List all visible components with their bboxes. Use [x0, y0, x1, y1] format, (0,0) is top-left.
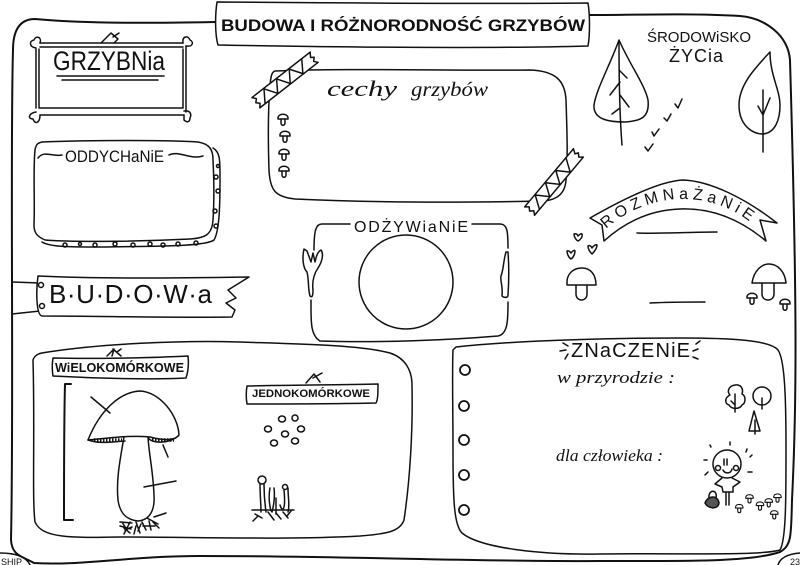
text: w przyrodzie: w przyrodzie : [557, 368, 675, 387]
banner: budowa [12, 276, 249, 317]
tape top [252, 52, 318, 108]
mushroom diagram [88, 391, 179, 534]
panel: rozmnażanie [566, 179, 791, 311]
panel: środowisko życia [594, 28, 780, 152]
title: BUDOWA I RÓŻNORODNOŚĆ GRZYBÓW [221, 16, 586, 35]
icon: fork [303, 249, 322, 297]
bracket [64, 384, 73, 520]
frame [36, 43, 186, 115]
icon: yeast cells [264, 415, 304, 446]
ribbon [590, 180, 777, 241]
icon: grass ticks [645, 99, 682, 151]
panel: cechy grzybów: grzybów [411, 79, 489, 101]
panel: wielokomórkowe i jednokomórkowe [33, 341, 412, 538]
label: jednokomórkowe [246, 373, 378, 404]
label: jednokomórkowe: JEDNOKOMÓRKOWE [252, 387, 370, 400]
title [216, 2, 589, 48]
heading: cechy [327, 76, 397, 101]
icon: mushroom right [747, 264, 790, 310]
heading: ZNaCZENiE [571, 340, 690, 362]
panel: oddychanie [34, 140, 220, 247]
label: wielokomórkowe: WiELOKOMÓRKOWE [55, 360, 184, 375]
label: wielokomórkowe [52, 349, 188, 379]
page tab left [0, 553, 30, 565]
panel: środowisko życia: ŻYCia [669, 46, 724, 66]
banner: budowa: B·U·D·O·W·a [49, 279, 213, 309]
icon: conifer tree [594, 40, 648, 145]
panel: odżywianie [303, 217, 509, 342]
icon: mould [252, 476, 294, 521]
heading: ODŻYWiaNiE [354, 217, 468, 236]
page tab right [778, 553, 800, 565]
ring holes [459, 365, 470, 515]
icon: small mushrooms [278, 114, 290, 177]
icon: mushroom left [567, 268, 596, 300]
pattern dots [63, 164, 220, 247]
text: dla człowieka: dla człowieka : [556, 446, 663, 465]
icon: small mushrooms [736, 494, 781, 519]
tape bottom [525, 149, 583, 215]
answer lines [637, 232, 717, 233]
heading: ŚRODOWiSKO [647, 28, 751, 46]
icon: pin on frame [101, 33, 119, 43]
heading: ODDYCHaNiE [65, 147, 164, 166]
icon: knife [501, 252, 509, 297]
heading: GRZYBNia [53, 46, 166, 76]
plate [359, 235, 453, 329]
icon: leaf tree [739, 52, 780, 152]
panel: grzybnia [29, 33, 192, 122]
icon: hearts [567, 234, 597, 259]
icon: small trees [726, 385, 771, 434]
panel: cechy grzybów [252, 52, 583, 215]
roots [120, 518, 159, 534]
panel: znaczenie [453, 338, 786, 554]
icon: child with basket [704, 442, 752, 508]
panel: rozmnażanie: ROZMNaŻaNiE [600, 186, 755, 228]
